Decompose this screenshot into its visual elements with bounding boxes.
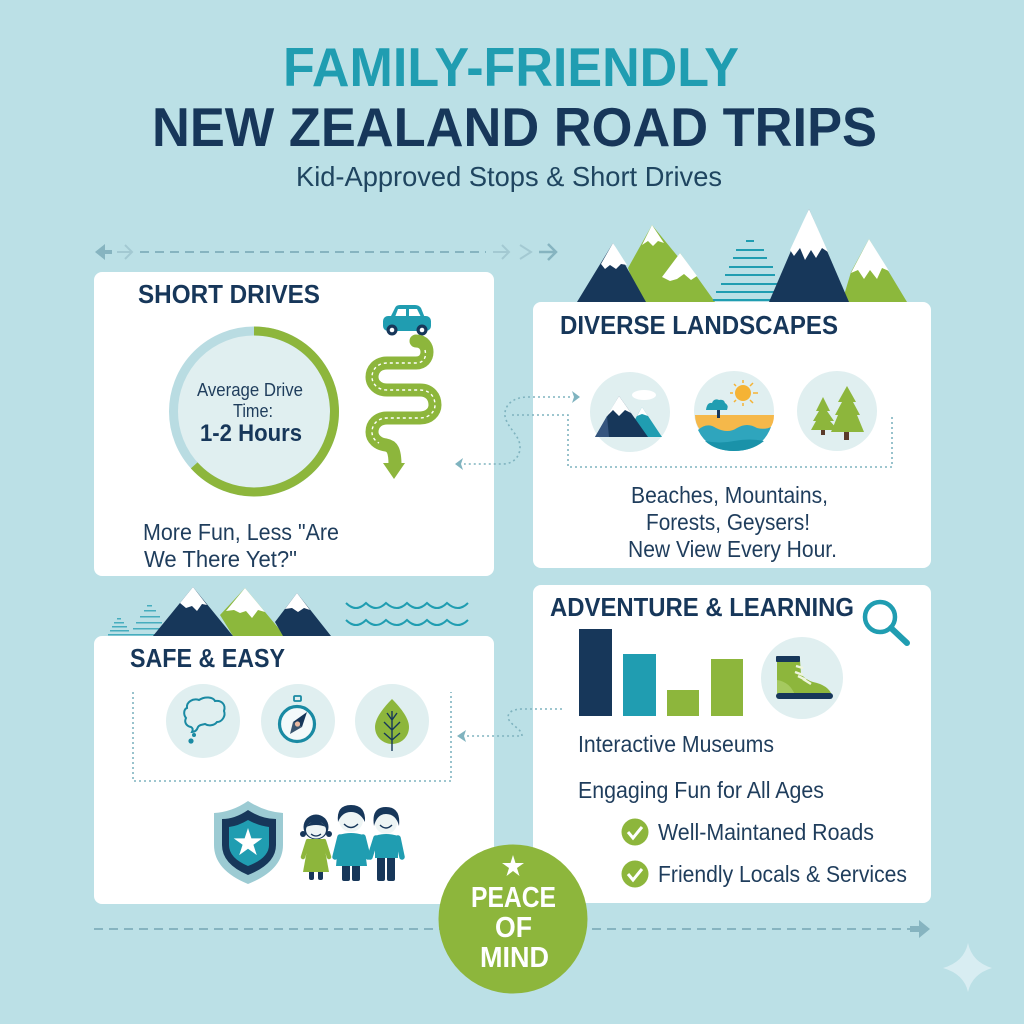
callout: peace of mind [438, 844, 588, 994]
heading: safe and easy: SAFE & EASY [130, 643, 285, 673]
text: more fun: We There Yet?" [144, 546, 297, 572]
icon: sparkle [943, 943, 992, 992]
callout: peace of mind: MIND [480, 942, 549, 974]
text: landscapes description: Beaches, Mountains, [631, 482, 828, 508]
icon: hiking boot [761, 637, 843, 719]
icon: trees [797, 371, 877, 451]
icon: car [383, 305, 431, 336]
icon: leaf [355, 684, 429, 758]
dashed connector bracket [512, 415, 892, 467]
waves [346, 603, 468, 625]
icon: family [300, 805, 402, 881]
icon: beach [694, 371, 774, 451]
icon: shield [214, 801, 283, 884]
callout: peace of mind: PEACE [471, 882, 556, 914]
adult figure 2 [370, 807, 402, 881]
bar chart [579, 629, 743, 716]
donut chart: average drive time: 1-2 Hours [200, 420, 302, 447]
heading: adventure and learning: ADVENTURE & LEARNING [550, 592, 854, 622]
dotted S arrow: between top panels [455, 391, 580, 470]
text: landscapes description [628, 482, 837, 562]
checklist item: roads: Well-Maintaned Roads [658, 819, 874, 845]
title: FAMILY-FRIENDLY [283, 36, 739, 98]
heading: short drives: SHORT DRIVES [138, 279, 320, 309]
icon: winding road with arrow [372, 341, 435, 479]
icon: thought bubble [166, 684, 240, 758]
icon: magnifying glass [865, 602, 907, 643]
panel: short drives [94, 272, 494, 576]
bottom dashed arrow [94, 920, 930, 938]
icon: mountain [590, 372, 670, 452]
child figure [300, 814, 332, 880]
heading: diverse landscapes: DIVERSE LANDSCAPES [560, 310, 838, 340]
callout: peace of mind: OF [495, 912, 532, 944]
text: landscapes description: New View Every Hour. [628, 536, 837, 562]
panel: diverse landscapes [512, 302, 931, 568]
donut chart: average drive time: Average Drive [197, 380, 303, 400]
mountains: left [108, 587, 331, 636]
title [152, 36, 877, 158]
text: engaging fun: Engaging Fun for All Ages [578, 777, 824, 803]
text: landscapes description: Forests, Geysers! [646, 509, 810, 535]
text: museums: Interactive Museums [578, 731, 774, 757]
donut chart: average drive time: Time: [233, 401, 273, 421]
subtitle: Kid-Approved Stops & Short Drives [296, 161, 722, 192]
panel: safe and easy [94, 636, 494, 904]
text: more fun [143, 519, 339, 572]
icon: compass [261, 684, 335, 758]
dashed bracket [133, 692, 451, 781]
text: more fun: More Fun, Less "Are [143, 519, 339, 545]
adult figure 1 [335, 805, 368, 881]
dotted S arrow: between lower panels [457, 709, 562, 742]
checklist item: locals: Friendly Locals & Services [658, 861, 907, 887]
mountains: top right [577, 209, 907, 302]
panel: adventure and learning [533, 585, 931, 903]
title: NEW ZEALAND ROAD TRIPS [152, 96, 877, 158]
top dashed arrow [95, 244, 556, 260]
donut chart: average drive time [174, 331, 334, 492]
